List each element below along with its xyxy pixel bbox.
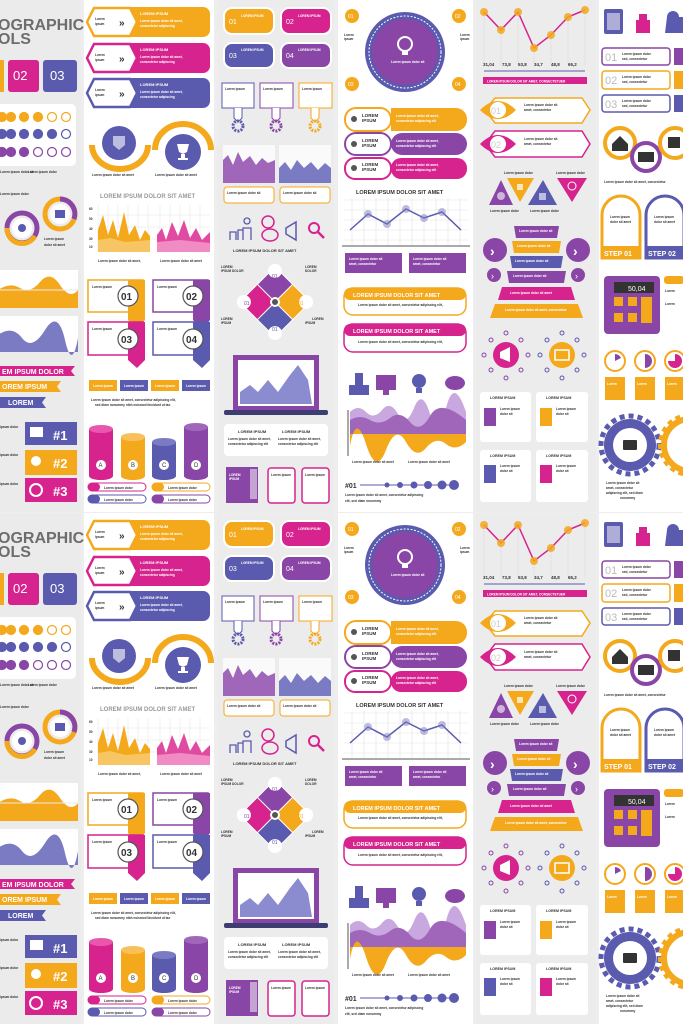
top tile — [0, 0, 683, 512]
bottom repeated tile — [0, 513, 683, 1024]
